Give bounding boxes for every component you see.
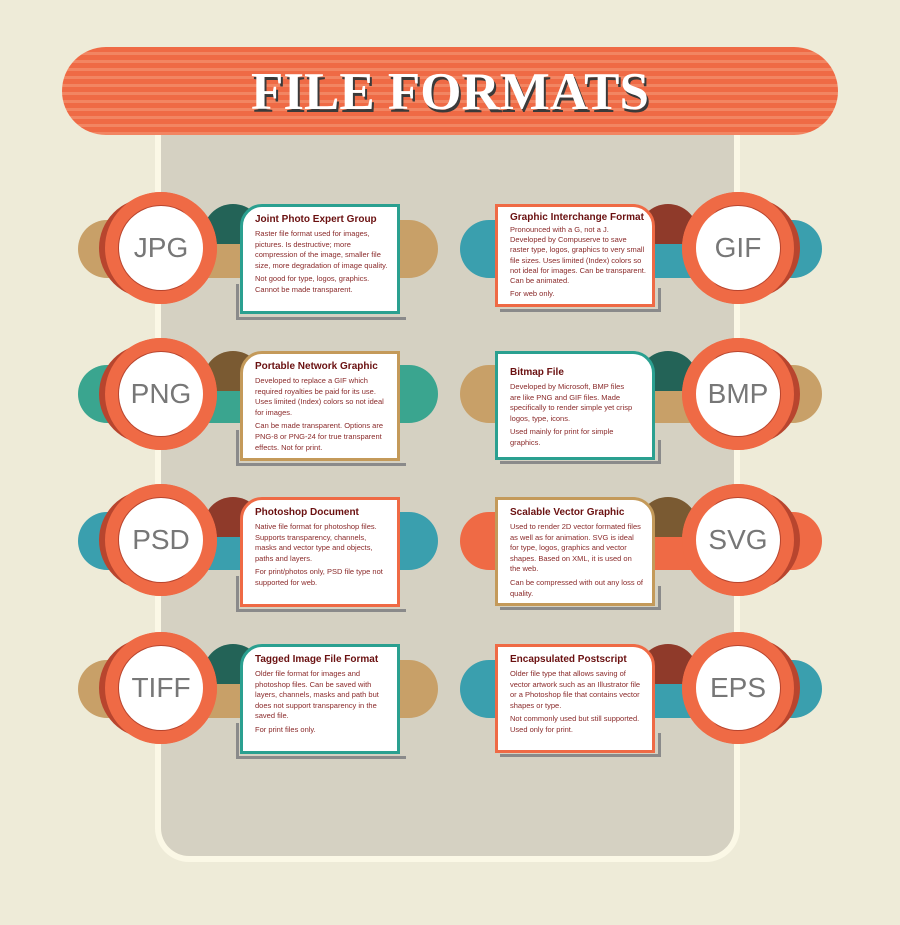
card EPS: Older file type that allows saving of vector artwork such as an Illustrator file or a Photoshop file that contains vector shapes or type. <box>510 669 640 710</box>
card SVG <box>495 497 655 606</box>
shadow TIFF <box>236 723 239 759</box>
title banner: FILE FORMATS <box>251 63 649 121</box>
title banner <box>62 47 838 135</box>
card PNG: Can be made transparent. Options are PNG-8 or PNG-24 for true transparent effects. Not for print. <box>255 421 383 452</box>
card PSD: Photoshop Document <box>255 507 359 518</box>
band TIFF <box>78 660 438 718</box>
card GIF: For web only. <box>510 289 554 298</box>
tab JPG <box>203 204 263 244</box>
card PNG: Developed to replace a GIF which required royalties be paid for its use. Uses limited (Index) colors so not ideal for images. <box>255 376 384 417</box>
card TIFF: Tagged Image File Format <box>255 654 378 665</box>
card SVG: Can be compressed with out any loss of quality. <box>510 578 643 598</box>
shadow SVG <box>658 586 661 610</box>
card PSD: For print/photos only, PSD file type not supported for web. <box>255 567 383 587</box>
card JPG: Not good for type, logos, graphics. Cannot be made transparent. <box>255 274 369 294</box>
band BMP <box>460 365 822 423</box>
shadow GIF <box>658 288 661 312</box>
card SVG: Scalable Vector Graphic <box>510 507 624 518</box>
shadow BMP <box>658 440 661 464</box>
background panel <box>155 100 740 862</box>
card JPG <box>240 204 400 314</box>
circle PNG: PNG <box>131 378 191 409</box>
circle PNG <box>105 338 217 450</box>
shadow PSD <box>236 576 239 612</box>
card BMP: Developed by Microsoft, BMP files are like PNG and GIF files. Made specifically to render simple yet crisp logos, type, icons. <box>510 382 632 423</box>
tab SVG <box>638 497 698 537</box>
card TIFF <box>240 644 400 754</box>
tab PSD <box>203 497 263 537</box>
circle TIFF <box>105 632 217 744</box>
tab PNG <box>203 351 263 391</box>
circle PSD <box>105 484 217 596</box>
band JPG <box>78 220 438 278</box>
circle GIF: GIF <box>715 232 761 263</box>
tab TIFF <box>203 644 263 684</box>
band EPS <box>460 660 822 718</box>
card SVG: Used to render 2D vector formated files as well as for animation. SVG is ideal for type, logos, graphics and vector shapes. Based on XML, it is used on the web. <box>510 522 641 573</box>
card BMP <box>495 351 655 460</box>
card PNG: Portable Network Graphic <box>255 361 378 372</box>
circle EPS <box>682 632 794 744</box>
tab EPS <box>638 644 698 684</box>
card EPS: Encapsulated Postscript <box>510 654 627 665</box>
shadow JPG <box>236 284 239 320</box>
circle JPG <box>105 192 217 304</box>
band SVG <box>460 512 822 570</box>
card GIF: Pronounced with a G, not a J. Developed by Compuserve to save raster type, logos, graphics to very small file sizes. Uses limited (Index) colors so not ideal for images. Can be transparent. Can be animated. <box>510 225 646 285</box>
circle EPS: EPS <box>710 672 766 703</box>
card GIF: Graphic Interchange Format <box>510 212 644 223</box>
circle BMP: BMP <box>708 378 768 409</box>
card JPG: Joint Photo Expert Group <box>255 214 377 225</box>
circle SVG: SVG <box>708 524 768 555</box>
card EPS <box>495 644 655 753</box>
band GIF <box>460 220 822 278</box>
card TIFF: For print files only. <box>255 725 316 734</box>
card BMP: Bitmap File <box>510 367 564 378</box>
card GIF <box>495 204 655 307</box>
circle TIFF: TIFF <box>131 672 191 703</box>
tab BMP <box>638 351 698 391</box>
band PSD <box>78 512 438 570</box>
circle SVG <box>682 484 794 596</box>
shadow PNG <box>236 430 239 466</box>
card PSD <box>240 497 400 607</box>
card JPG: Raster file format used for images, pictures. Is destructive; more compression of the image, smaller file size, more degradation of image quality. <box>255 229 387 270</box>
circle BMP <box>682 338 794 450</box>
card EPS: Not commonly used but still supported. Used only for print. <box>510 714 639 734</box>
circle GIF <box>682 192 794 304</box>
card PSD: Native file format for photoshop files. Supports transparency, channels, masks and vector type and objects, paths and layers. <box>255 522 377 563</box>
card BMP: Used mainly for print for simple graphics. <box>510 427 613 447</box>
card TIFF: Older file format for images and photoshop files. Can be saved with layers, channels, masks and path but does not support transparency in the saved file. <box>255 669 379 720</box>
band PNG <box>78 365 438 423</box>
tab GIF <box>638 204 698 244</box>
circle PSD: PSD <box>132 524 190 555</box>
card PNG <box>240 351 400 461</box>
circle JPG: JPG <box>134 232 188 263</box>
shadow EPS <box>658 733 661 757</box>
